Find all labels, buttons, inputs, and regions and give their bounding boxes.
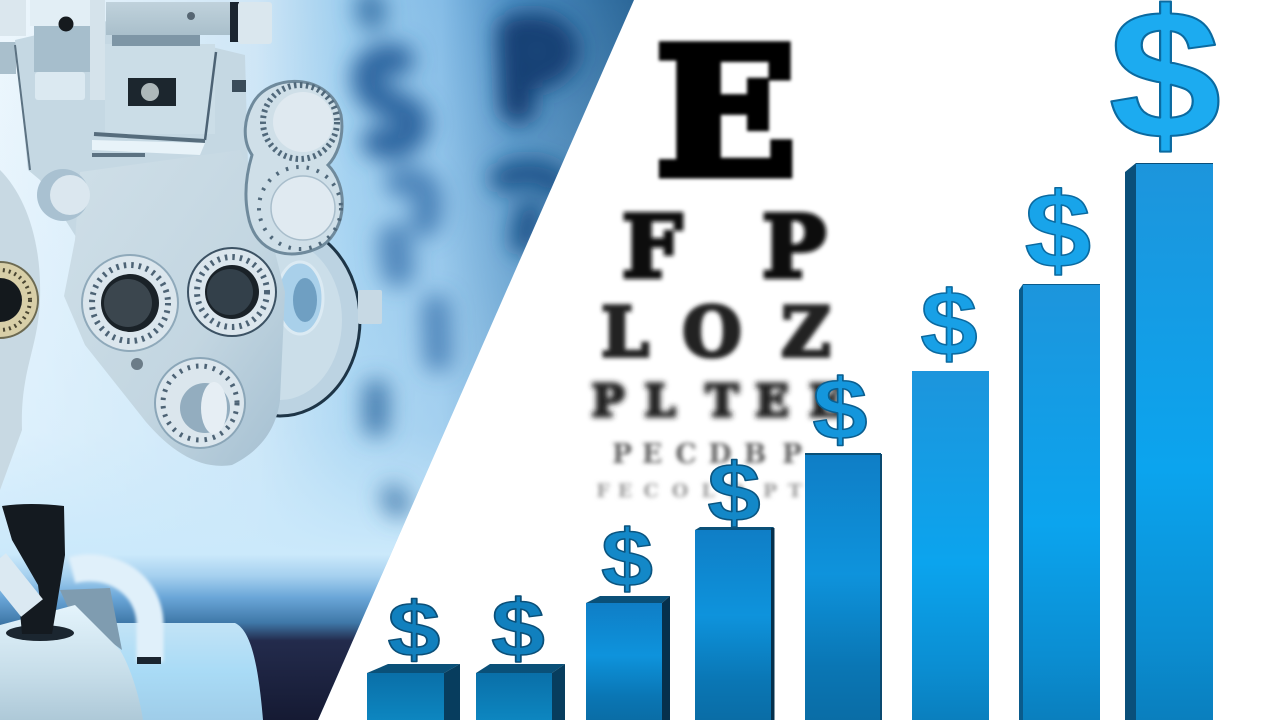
dollar 1: $ — [388, 587, 440, 673]
chart line 5: P — [612, 439, 632, 470]
panel: phoropter photo — [0, 0, 640, 720]
chart line 5: E — [642, 439, 662, 470]
chart line 6: T — [788, 480, 802, 502]
chart line E: E — [655, 9, 797, 216]
chart line L O Z: Z — [781, 293, 831, 373]
chart line P L T E E: T — [706, 376, 739, 427]
dollar 5: $ — [813, 361, 867, 458]
chart line 5: P — [782, 439, 802, 470]
chart line 6: L — [701, 480, 715, 502]
knob — [37, 169, 90, 221]
chart line P L T E E: P — [591, 376, 625, 427]
chart line 5: B — [744, 439, 766, 470]
phoropter face — [64, 150, 285, 466]
bar 4 — [695, 527, 774, 720]
bar 3 — [586, 596, 670, 720]
bar 5 — [805, 453, 882, 720]
chart line 6: P — [763, 480, 777, 502]
chart line P L T E E: E — [809, 376, 843, 427]
large rear disk — [276, 242, 382, 418]
chart line L O Z — [601, 293, 831, 373]
dollar 6: $ — [920, 272, 978, 375]
instrument table — [0, 568, 263, 720]
chart line F P — [621, 197, 826, 298]
bar 6 — [912, 371, 989, 720]
left neighbouring unit — [0, 170, 40, 490]
bar 7 — [1019, 284, 1100, 720]
chart line 5: C — [675, 439, 697, 470]
left eye ring — [82, 255, 178, 351]
chart line L O Z: O — [682, 293, 742, 373]
phoropter upper column — [0, 0, 272, 240]
chart line P L T E E: E — [755, 376, 789, 427]
joystick arm — [0, 562, 32, 608]
eye chart — [591, 9, 843, 502]
lower dial — [155, 358, 245, 448]
chart line F P: P — [762, 197, 826, 298]
chart line 6: D — [728, 480, 744, 502]
chart line 5 — [612, 439, 802, 470]
bar 1 — [367, 664, 460, 720]
chart line P L T E E: L — [645, 376, 675, 427]
bar 2 — [476, 664, 565, 720]
chart line P L T E E — [591, 376, 843, 427]
chart line 6: C — [643, 480, 659, 502]
chart line F P: F — [621, 197, 683, 298]
chart line 6: O — [672, 480, 688, 502]
dollar 4: $ — [707, 446, 761, 539]
bar 8 — [1125, 163, 1213, 720]
chart line 6: F — [596, 480, 610, 502]
dual dial — [245, 81, 342, 254]
chart line 5: D — [708, 439, 732, 470]
dollar signs — [388, 0, 1221, 673]
chart line 6: E — [618, 480, 632, 502]
dollar 3: $ — [601, 514, 653, 604]
dollar 2: $ — [491, 582, 545, 673]
joystick — [2, 504, 65, 634]
chart line 6 — [596, 480, 802, 502]
chart line L O Z: L — [601, 293, 649, 373]
right eye ring — [188, 248, 276, 336]
bar chart — [367, 163, 1213, 720]
dollar 7: $ — [1025, 171, 1091, 291]
